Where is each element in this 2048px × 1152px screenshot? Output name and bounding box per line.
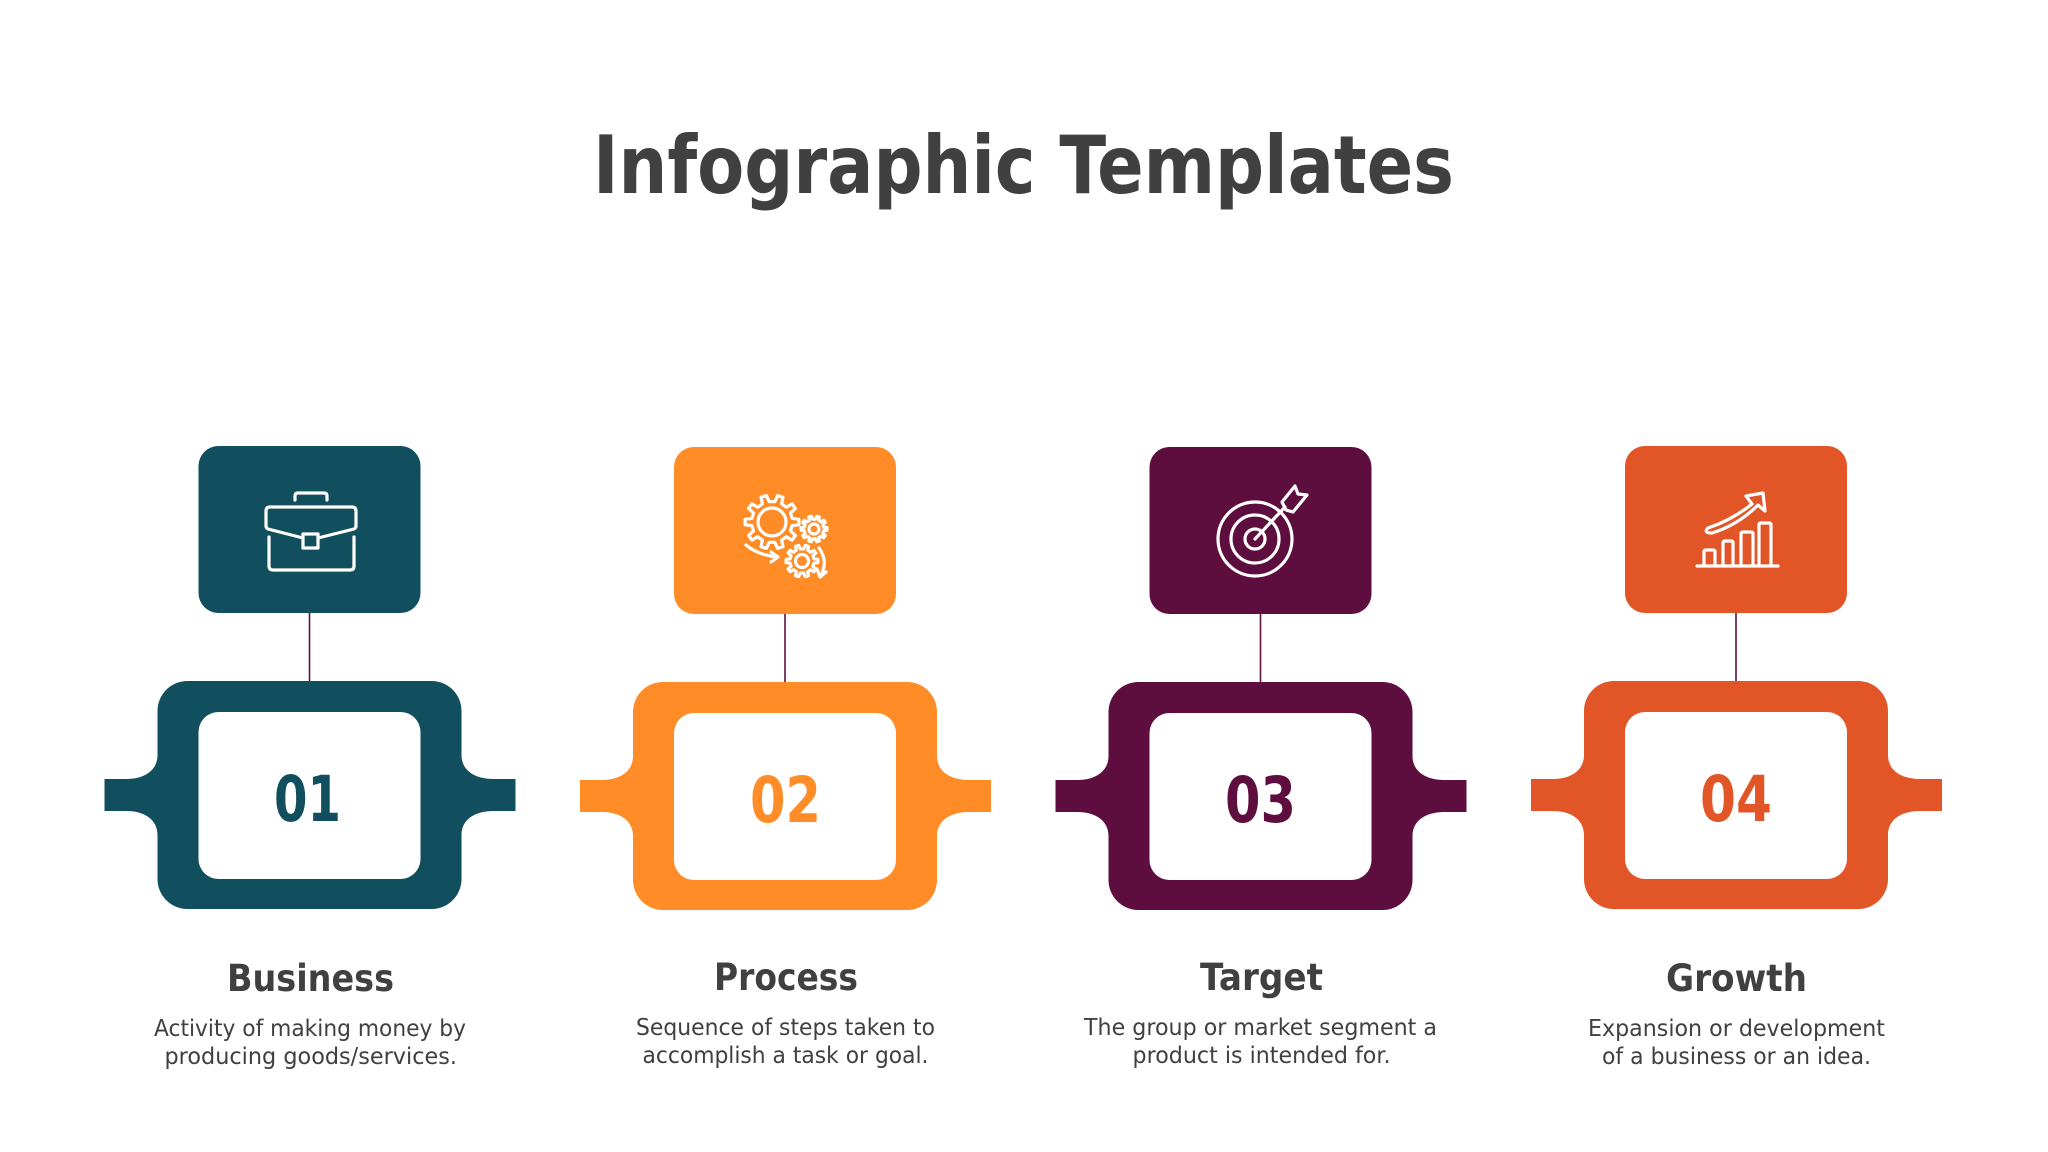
icon card: briefcase xyxy=(198,446,420,613)
panel: step 02 Process xyxy=(580,447,991,1069)
number frame xyxy=(580,682,991,910)
heading: Business xyxy=(227,957,394,1000)
connector line xyxy=(1260,614,1262,682)
description xyxy=(1588,1014,1885,1070)
description xyxy=(154,1014,466,1070)
heading: Target xyxy=(1200,956,1323,999)
connector line xyxy=(308,613,310,681)
description: accomplish a task or goal. xyxy=(642,1041,928,1069)
number: 01 xyxy=(274,763,341,836)
description: Activity of making money by xyxy=(154,1014,466,1042)
description xyxy=(636,1013,935,1069)
description xyxy=(1083,1013,1437,1069)
number: 03 xyxy=(1225,764,1296,837)
number: 04 xyxy=(1700,763,1772,836)
connector line xyxy=(784,614,786,682)
number frame xyxy=(1531,681,1942,909)
panel: step 01 Business xyxy=(104,446,516,1070)
icon: gears xyxy=(745,496,827,577)
panel: step 03 Target xyxy=(1056,447,1466,1069)
heading: Growth xyxy=(1666,957,1807,1000)
icon: growth chart xyxy=(1697,493,1778,566)
number frame xyxy=(1056,682,1466,910)
title: Infographic Templates xyxy=(593,119,1454,212)
number frame xyxy=(104,681,516,909)
icon card: growth chart xyxy=(1625,446,1847,613)
description: Expansion or development xyxy=(1588,1014,1885,1042)
icon: target xyxy=(1218,486,1307,576)
description: Sequence of steps taken to xyxy=(636,1013,935,1041)
heading: Process xyxy=(714,956,858,999)
description: product is intended for. xyxy=(1132,1041,1390,1069)
icon card: target xyxy=(1150,447,1372,614)
description: of a business or an idea. xyxy=(1602,1042,1871,1070)
description: producing goods/services. xyxy=(164,1042,457,1070)
panel: step 04 Growth xyxy=(1531,446,1942,1070)
connector line xyxy=(1735,613,1737,681)
number: 02 xyxy=(750,764,821,837)
icon card: gears xyxy=(674,447,896,614)
icon: briefcase xyxy=(266,493,356,570)
description: The group or market segment a xyxy=(1083,1013,1437,1041)
